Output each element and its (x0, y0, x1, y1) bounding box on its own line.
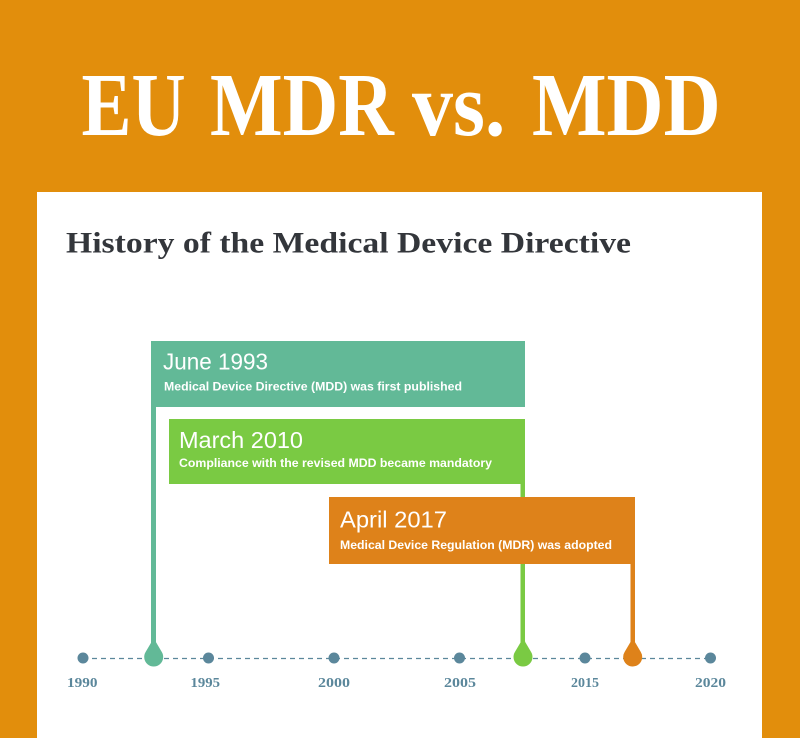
title: MDD (532, 56, 721, 155)
event: March 2010: Compliance with the revised MDD became mandatory (179, 456, 492, 470)
title: MDR (210, 55, 395, 155)
timeline axis: 2005 (444, 676, 476, 691)
panel: history timeline (37, 192, 762, 738)
event: April 2017: April 2017 (340, 506, 447, 532)
title: vs. (412, 55, 505, 155)
timeline axis: 1995 (190, 676, 220, 691)
timeline axis: 2015 (571, 676, 599, 691)
timeline axis (67, 652, 726, 691)
event: June 1993: Medical Device Directive (MDD) was first published (164, 380, 462, 394)
event: June 1993: June 1993 (163, 348, 268, 374)
timeline axis: 1990 (67, 676, 98, 691)
title (82, 55, 721, 155)
title: EU (82, 55, 186, 155)
timeline axis: 2000 (318, 676, 350, 691)
event: April 2017: Medical Device Regulation (MDR) was adopted (340, 538, 612, 552)
event: March 2010: March 2010 (179, 427, 303, 453)
event: June 1993 (144, 341, 525, 666)
heading: History of the Medical Device Directive (66, 226, 631, 260)
event: March 2010 (169, 419, 532, 666)
timeline axis: 2020 (695, 676, 726, 691)
event: April 2017 (329, 497, 642, 666)
